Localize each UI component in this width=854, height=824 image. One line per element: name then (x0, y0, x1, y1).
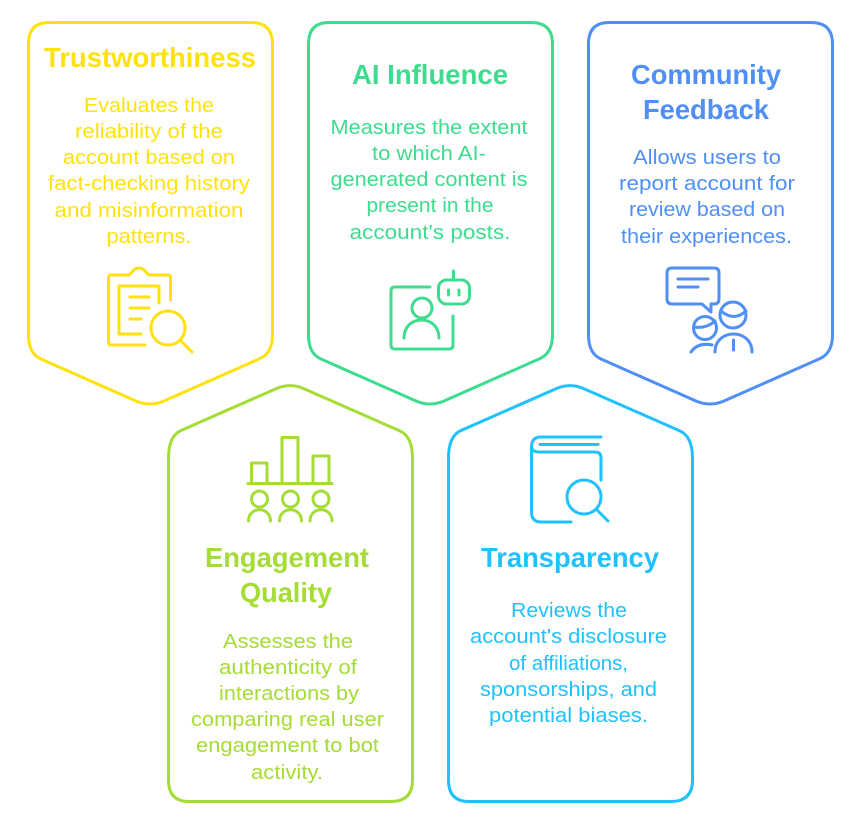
text block: Transparency description: of affiliations, (509, 653, 628, 675)
heading: Community Feedback (631, 59, 782, 125)
panel: Community Feedback (588, 22, 832, 404)
text block: Transparency description: sponsorships, and (480, 679, 657, 701)
text block: Community Feedback description: report account for (619, 173, 795, 195)
panel: AI Influence (308, 22, 552, 404)
text block: AI Influence description (330, 117, 528, 244)
text block: Engagement Quality description: interactions by (219, 683, 359, 705)
heading: Trustworthiness: Trustworthiness (44, 42, 256, 73)
text block: Trustworthiness description: patterns. (106, 226, 192, 248)
text block: Trustworthiness description: and misinformation (54, 200, 244, 222)
text block: Transparency description (470, 600, 667, 727)
heading: Engagement Quality: Quality (240, 577, 333, 608)
text block: Transparency description: potential biases. (489, 705, 648, 727)
heading: AI Influence: AI Influence (352, 59, 508, 90)
panel outline: Trustworthiness (28, 22, 272, 404)
text block: Transparency description: account's disclosure (470, 626, 667, 648)
text block: Trustworthiness description: reliability of the (75, 121, 223, 143)
icon: clipboard with magnifier (108, 268, 192, 352)
text block: AI Influence description: to which AI- (372, 143, 486, 165)
text block: Trustworthiness description: account based on (63, 147, 235, 169)
text block: AI Influence description: present in the (366, 195, 494, 217)
text block: Engagement Quality description: comparing real user (191, 709, 384, 731)
text block: Trustworthiness description: fact-checking history (48, 173, 250, 195)
heading: Engagement Quality (205, 542, 369, 608)
text block: Engagement Quality description: activity. (251, 762, 323, 784)
panel outline: Transparency (448, 386, 692, 802)
text block: AI Influence description: Measures the extent (330, 117, 528, 139)
text block: Engagement Quality description: engagement to bot (196, 735, 379, 757)
panel: Transparency (448, 386, 692, 802)
icon: speech bubble with two people (667, 268, 752, 352)
heading: Transparency: Transparency (481, 542, 660, 573)
text block: Community Feedback description: Allows users to (633, 147, 781, 169)
text block: Transparency description: Reviews the (511, 600, 627, 622)
heading: Engagement Quality: Engagement (205, 542, 369, 573)
text block: Engagement Quality description: Assesses the (223, 631, 353, 653)
text block: AI Influence description: account's posts. (350, 222, 510, 244)
panel outline: Community Feedback (588, 22, 832, 404)
icon: bar chart with three people (248, 438, 332, 521)
panel outline: Engagement Quality (168, 386, 412, 802)
text block: Engagement Quality description (191, 631, 384, 784)
text block: Community Feedback description (619, 147, 795, 248)
heading: Community Feedback: Community (631, 59, 782, 90)
text block: AI Influence description: generated content is (330, 169, 528, 191)
text block: Trustworthiness description (48, 95, 250, 248)
icon: book with magnifier (532, 437, 608, 522)
heading: Community Feedback: Feedback (643, 94, 770, 125)
text block: Community Feedback description: their experiences. (621, 226, 792, 248)
panel: Engagement Quality (168, 386, 412, 802)
panel outline: AI Influence (308, 22, 552, 404)
text block: Community Feedback description: review based on (629, 199, 785, 221)
panel: Trustworthiness (28, 22, 272, 404)
text block: Engagement Quality description: authenticity of (219, 657, 357, 679)
text block: Trustworthiness description: Evaluates the (84, 95, 214, 117)
icon: person with robot (391, 271, 470, 349)
